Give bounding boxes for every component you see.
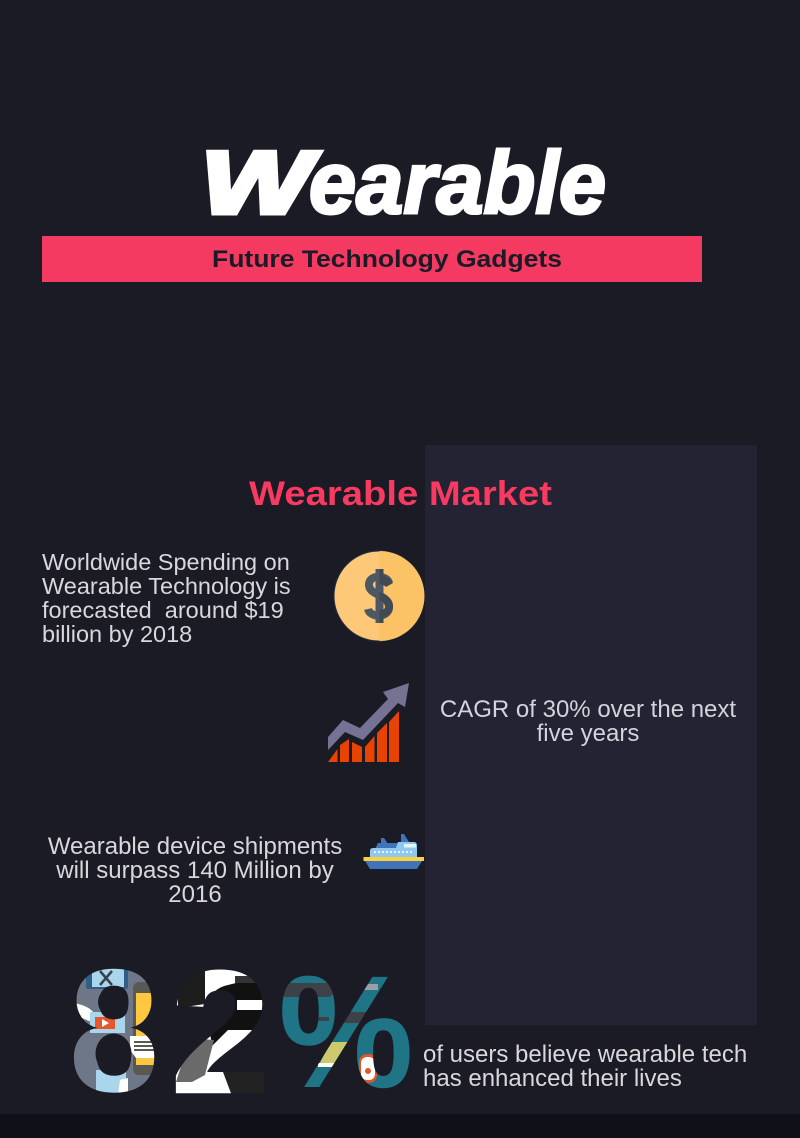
icon: dollar coin xyxy=(334,551,424,641)
number 82 percent xyxy=(74,968,410,1094)
CAGR text: five years xyxy=(537,720,639,747)
icon: ship xyxy=(364,834,424,869)
icon: growth chart xyxy=(328,683,409,762)
text: spending: forecasted around $19 xyxy=(42,597,284,623)
text: spending: Worldwide Spending on xyxy=(42,549,290,575)
text: shipments: will surpass 140 Million by xyxy=(55,857,334,884)
text: shipments: Wearable device shipments xyxy=(48,833,342,860)
percent sign xyxy=(282,976,410,1088)
panel: CAGR xyxy=(425,445,757,1025)
digit 2 xyxy=(176,970,262,1094)
text: shipments: 2016 xyxy=(168,881,222,908)
subtitle: Future Technology Gadgets xyxy=(212,246,562,273)
digit 8 xyxy=(74,968,154,1093)
section heading: Wearable Market xyxy=(249,475,552,513)
text: users believe: has enhanced their lives xyxy=(423,1065,682,1092)
text: spending: Wearable Technology is xyxy=(42,573,291,599)
text: spending: billion by 2018 xyxy=(42,621,192,647)
CAGR text: CAGR of 30% over the next xyxy=(440,696,736,723)
title: W earable xyxy=(201,133,606,232)
subtitle banner xyxy=(42,236,702,282)
text: users believe: of users believe wearable tech xyxy=(423,1041,747,1068)
